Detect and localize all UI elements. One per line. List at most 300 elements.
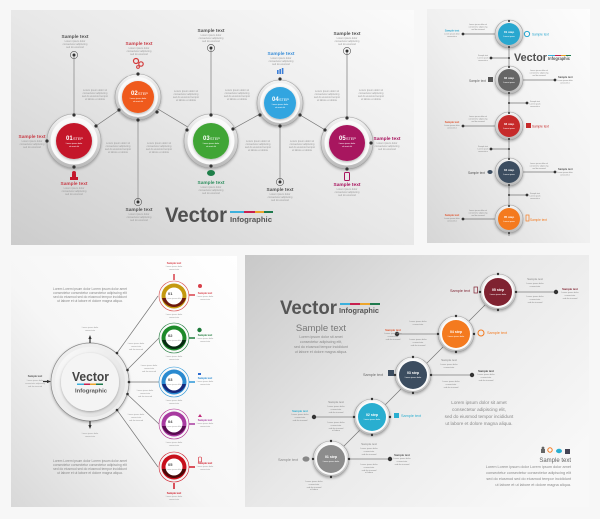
lorem blocks between steps: sed do eiusmod tempor: [314, 96, 340, 99]
lorem captions: Lorem ipsum dolor: [393, 457, 411, 460]
sample text labels row 1: consectetur adipiscing: [335, 191, 360, 194]
lorem blocks: Lorem ipsum dolor: [557, 171, 573, 174]
lorem blocks between steps: consectetur adipiscing: [106, 145, 131, 148]
step 4 navy: 04 step: [504, 168, 514, 172]
node labels: Sample text: [198, 418, 212, 422]
node captions: Lorem ipsum dolor: [197, 423, 214, 425]
lorem blocks: Lorem ipsum dolor sit: [530, 162, 549, 165]
lorem blocks between steps: consectetur adipiscing: [83, 92, 108, 95]
node captions: Lorem ipsum dolor: [197, 381, 214, 383]
node labels: Sample text: [167, 491, 181, 495]
step 1 red: [47, 114, 101, 168]
icons row bottom right: [541, 447, 570, 454]
step circles: 01 step: [504, 30, 514, 34]
lorem captions: sed do eiusmod: [444, 387, 459, 389]
title: Vector Infographic small: Infographic: [548, 56, 571, 61]
node captions: consectetur: [169, 316, 180, 319]
title: Vector Infographic: Vector: [165, 204, 227, 227]
step 5 maroon: 05 step: [492, 288, 504, 292]
step labels: Sample text: [278, 458, 299, 462]
node captions: Lorem ipsum dolor: [137, 390, 154, 392]
lorem blocks: consectetur: [530, 105, 540, 108]
node captions: consectetur: [169, 498, 180, 501]
node 1 gold: 01: [168, 291, 173, 296]
lorem blocks: sed do eiusmod: [471, 29, 485, 31]
lorem captions: Sample text: [441, 358, 457, 362]
step labels: Sample text: [558, 75, 573, 79]
step 3 red: Lorem ipsum: [503, 128, 515, 130]
lorem captions: consectetur: [530, 298, 541, 301]
lorem blocks: sed do eiusmod: [532, 75, 546, 77]
lorem blocks between steps: Lorem ipsum dolor sit: [174, 90, 198, 93]
sample text labels row 1: consectetur adipiscing: [199, 37, 224, 40]
node 1 gold: [159, 281, 189, 311]
node captions: consectetur: [169, 402, 180, 405]
step labels: Sample text: [394, 453, 410, 457]
lorem captions: consectetur: [413, 323, 424, 326]
node captions: sed do eiusmod: [142, 371, 156, 373]
sample text labels row 1: consectetur adipiscing: [269, 60, 294, 63]
lorem captions: Lorem ipsum dolor: [384, 332, 402, 335]
step 4 blue: 04: [272, 97, 279, 103]
lorem captions: Sample text: [527, 277, 543, 281]
title: Vector Infographic large: Vector: [280, 297, 337, 319]
connector dots: [45, 72, 373, 171]
lorem blocks: Lorem ipsum dolor: [557, 79, 573, 82]
step 5 orange: 05 step: [504, 215, 514, 219]
lorem blocks between steps: ut labore et dolore: [292, 149, 313, 152]
paragraph bottom right: Lorem Lorem ipsum dolor Lorem ipsum dolor amet: [486, 465, 572, 469]
lorem blocks between steps: ut labore et dolore: [85, 98, 106, 101]
step 5 purple: [321, 117, 373, 169]
lorem captions: consectetur: [446, 383, 457, 386]
node 4 magenta: [159, 409, 189, 439]
step labels: Sample text: [530, 218, 547, 222]
lorem blocks between steps: sed do eiusmod tempor: [146, 148, 172, 151]
node labels: Sample text: [198, 461, 212, 465]
lorem captions: Lorem ipsum dolor: [561, 291, 579, 294]
lorem blocks between steps: ut labore et dolore: [227, 98, 248, 101]
sample text labels row 1: consectetur adipiscing: [127, 216, 152, 219]
title: Vector Infographic: Infographic: [230, 215, 272, 224]
step labels: [278, 287, 578, 462]
lorem captions: Lorem ipsum dolor: [409, 338, 427, 341]
step 4 navy: Lorem ipsum: [503, 174, 515, 176]
step labels: Sample text: [478, 369, 494, 373]
node arrows and icons: [174, 274, 202, 489]
node captions: Lorem ipsum dolor: [128, 343, 145, 345]
node captions: consectetur: [169, 358, 180, 361]
lorem blocks: Lorem ipsum dolor sit: [469, 115, 488, 118]
step 2 orange: sit amet elit: [133, 100, 143, 103]
lorem captions: ut labore: [332, 429, 341, 432]
sample text labels row 1: Lorem ipsum dolor: [129, 47, 150, 50]
lorem captions: consectetur: [444, 366, 455, 369]
heading paragraph left: Lorem ipsum dolor sit amet: [299, 335, 343, 339]
step circles: Lorem ipsum: [503, 36, 515, 38]
lorem captions: Lorem ipsum dolor: [526, 295, 544, 298]
sample text labels row 1: sed do eiusmod: [202, 192, 220, 195]
lorem blocks: Lorem ipsum dolor: [444, 217, 460, 220]
hub circle: [51, 343, 129, 421]
sample text labels row 1: sed do eiusmod: [338, 43, 356, 46]
step labels: Sample text: [445, 213, 459, 217]
step 4 orange: 04 step: [450, 330, 462, 334]
lorem captions: sed do eiusmod: [479, 380, 494, 382]
step 3 green: [184, 114, 238, 168]
lorem blocks: consectetur adipiscing: [530, 164, 548, 168]
hub arrows: [43, 335, 130, 429]
node 4 magenta: 04: [168, 419, 173, 424]
paragraph bottom right: ut labore et ut labore et dolore magna aliqua.: [495, 483, 571, 487]
paragraph bottom: Lorem Lorem ipsum dolor Lorem ipsum dolor amet: [53, 459, 127, 463]
heading paragraph left: Sample text: [296, 323, 346, 334]
sample text labels row 1: Sample text: [198, 28, 225, 34]
node captions: consectetur: [144, 367, 155, 370]
lorem captions: Lorem ipsum dolor: [442, 380, 460, 383]
node captions: sed do eiusmod: [28, 386, 42, 388]
lorem captions: consectetur: [309, 483, 320, 486]
title: Vector Infographic small: [514, 52, 571, 64]
lorem captions: Lorem ipsum dolor: [360, 447, 378, 450]
sample text labels row 1: Lorem ipsum dolor: [377, 142, 398, 145]
node 2 green: 02: [168, 333, 173, 338]
step 2 gray: 02 step: [504, 76, 514, 80]
connector dots: [312, 273, 558, 478]
paragraph centre: ut labore et dolore magna aliqua.: [445, 421, 513, 426]
node captions: Lorem ipsum dolor: [166, 400, 183, 402]
lorem blocks: [444, 23, 573, 222]
sample text labels row 1: consectetur adipiscing: [20, 143, 45, 146]
lorem blocks: consectetur adipiscing: [469, 212, 487, 214]
lorem blocks: consectetur adipiscing: [469, 118, 487, 120]
lorem blocks between steps: ut labore et dolore: [149, 151, 170, 154]
lorem blocks: consectetur: [560, 174, 570, 176]
step labels: Sample text: [469, 79, 486, 83]
step 5 purple: STEP: [346, 137, 356, 141]
sample text labels row 1: Sample text: [334, 182, 361, 188]
step 1 red: STEP: [73, 137, 83, 141]
lorem captions: consectetur: [295, 416, 306, 419]
step 4 blue: sit amet elit: [275, 106, 285, 109]
paragraph top: Lorem Lorem ipsum dolor Lorem ipsum dolor amet: [53, 287, 127, 291]
paragraph bottom right: consectetur consectetur consectetur adipiscing elit: [486, 471, 572, 475]
lorem captions: sed do eiusmod: [329, 428, 344, 430]
sample text labels row 1: Lorem ipsum dolor: [337, 188, 358, 191]
heading paragraph left: [294, 323, 348, 354]
sample text labels row 1: sed do eiusmod: [23, 146, 41, 149]
lorem captions: consectetur: [388, 335, 399, 338]
title: Vector Infographic large: [280, 297, 380, 319]
sample text labels row 1: Sample text: [198, 180, 225, 186]
lorem blocks between steps: consectetur adipiscing: [147, 145, 172, 148]
step labels: Sample text: [487, 331, 508, 335]
node labels: Sample text: [198, 376, 212, 380]
node captions: Lorem ipsum dolor: [197, 466, 214, 468]
sample text labels row 1: Lorem ipsum dolor: [201, 186, 222, 189]
sample text labels row 1: sed do eiusmod: [65, 193, 83, 196]
step 5 maroon: [480, 274, 516, 310]
lorem blocks between steps: consectetur adipiscing: [359, 92, 384, 95]
paragraph bottom right: Sample text: [539, 458, 571, 464]
node captions: Lorem ipsum dolor: [166, 314, 183, 316]
lorem blocks: Sample text: [478, 145, 488, 148]
paragraph bottom: ut labore et ut labore et dolore magna aliqua.: [57, 471, 123, 475]
node captions: Lorem ipsum dolor: [82, 327, 99, 329]
sample text labels row 1: Lorem ipsum dolor: [65, 40, 86, 43]
sample text labels row 1: consectetur adipiscing: [62, 190, 87, 193]
paragraph bottom right: sed do eiusmod sed do eiusmod tempor incididunt: [486, 477, 572, 481]
lorem captions: Sample text: [361, 442, 377, 446]
sample text labels row 1: Sample text: [62, 34, 89, 40]
node captions: Lorem ipsum dolor: [166, 442, 183, 444]
lorem captions: consectetur: [364, 466, 375, 469]
lorem blocks: Lorem ipsum dolor: [444, 124, 460, 127]
sample text labels row 1: Sample text: [61, 181, 88, 187]
node captions: consectetur: [200, 340, 211, 343]
lorem blocks between steps: ut labore et dolore: [108, 151, 129, 154]
lorem captions: ut labore: [310, 488, 319, 491]
node captions: consectetur: [200, 468, 211, 471]
step 2 gray: Lorem ipsum: [503, 82, 515, 84]
title: Vector Infographic large: Infographic: [339, 308, 379, 315]
lorem blocks: sed do eiusmod: [471, 121, 485, 123]
step 1 gray: Lorem ipsum dolor: [323, 461, 340, 463]
sample text labels row 1: sed do eiusmod: [338, 194, 356, 197]
node captions: Lorem ipsum dolor: [166, 356, 183, 358]
step 4 orange: Lorem ipsum dolor: [448, 336, 465, 338]
node labels: Sample text: [28, 374, 42, 378]
lorem blocks: consectetur adipiscing: [530, 72, 548, 74]
sample text labels row 1: sed do eiusmod: [378, 148, 396, 151]
connector dots: [462, 20, 556, 234]
heading paragraph left: ut labore et dolore magna aliqua.: [295, 350, 347, 354]
sample text labels row 1: Lorem ipsum dolor: [337, 37, 358, 40]
lorem blocks: Sample text: [530, 100, 540, 103]
node 2 green: [159, 323, 189, 353]
step 2 orange: 02: [131, 91, 138, 97]
title: Vector Infographic small: Vector: [514, 52, 548, 64]
step circles: [495, 20, 523, 48]
step 2 orange: [115, 74, 161, 120]
heading paragraph left: consectetur adipiscing elit,: [300, 340, 342, 344]
lorem captions: Lorem ipsum dolor: [327, 421, 345, 424]
step 2 orange: STEP: [138, 92, 148, 96]
node captions: consectetur: [85, 329, 96, 332]
sample text labels row 1: Sample text: [126, 41, 153, 47]
step 3 green: Lorem ipsum dolor: [203, 143, 220, 145]
paragraph bottom: [53, 459, 127, 475]
node labels: Sample text: [167, 261, 181, 265]
sample text labels row 1: Sample text: [126, 207, 153, 213]
sample text labels row 1: Lorem ipsum dolor: [64, 187, 85, 190]
panel: radial hub: [11, 256, 237, 507]
node captions: Lorem ipsum dolor: [27, 380, 44, 382]
lorem blocks between steps: Lorem ipsum dolor sit: [83, 89, 107, 92]
lorem captions: consectetur: [565, 294, 576, 297]
sample text labels row 1: Sample text: [334, 31, 361, 37]
node 5 red: Lorem ipsum dolor: [167, 469, 182, 471]
lorem captions: sed do eiusmod: [411, 345, 426, 347]
step 5 purple: 05: [339, 136, 346, 142]
lorem blocks between steps: sed do eiusmod tempor: [245, 146, 271, 149]
lorem captions: sed do eiusmod: [528, 302, 543, 304]
lorem captions: consectetur: [364, 450, 375, 453]
step 1 red: sit amet elit: [69, 145, 79, 148]
node 3 blue: [159, 367, 189, 397]
step 4 blue: STEP: [279, 98, 289, 102]
node captions: consectetur: [169, 268, 180, 271]
lorem blocks: Sample text: [478, 54, 488, 57]
icons row 1: [70, 58, 350, 180]
paragraph bottom right: [486, 458, 572, 487]
lorem captions: Lorem ipsum dolor: [526, 282, 544, 285]
lorem captions: sed do eiusmod: [362, 454, 377, 456]
node captions: consectetur: [169, 444, 180, 447]
step labels: Sample text: [532, 32, 549, 36]
step 3 green: sit amet elit: [206, 145, 216, 148]
paragraph bottom: sed do eiusmod sed do eiusmod tempor incididunt: [53, 467, 127, 471]
sample text labels row 1: Lorem ipsum dolor: [129, 213, 150, 216]
step labels: [445, 28, 573, 222]
step 4 orange: [438, 316, 474, 352]
lorem blocks: Lorem ipsum: [478, 56, 489, 60]
lorem blocks between steps: consectetur adipiscing: [225, 92, 250, 95]
step 1 red: 01: [66, 136, 73, 142]
lorem captions: consectetur: [530, 285, 541, 288]
lorem blocks between steps: consectetur adipiscing: [174, 93, 199, 96]
lorem captions: [291, 277, 579, 491]
lorem blocks: consectetur: [447, 35, 457, 38]
node captions: Lorem ipsum dolor: [82, 433, 99, 435]
lorem blocks between steps: sed do eiusmod tempor: [82, 95, 108, 98]
sample text labels row 1: sed do eiusmod: [202, 40, 220, 43]
lorem captions: sed do eiusmod: [395, 464, 410, 466]
node captions: consectetur: [131, 345, 142, 348]
lorem captions: Lorem ipsum dolor: [440, 363, 458, 366]
node 2 green: Lorem ipsum dolor: [167, 340, 182, 342]
lorem blocks: Sample text: [530, 192, 540, 195]
step labels: Sample text: [292, 409, 308, 413]
step 1 gray: [313, 441, 349, 477]
lorem captions: sed do eiusmod: [563, 298, 578, 300]
sample text labels row 1: sed do eiusmod: [130, 53, 148, 56]
sample text labels row 1: consectetur adipiscing: [199, 189, 224, 192]
sample text labels row 1: Lorem ipsum dolor: [270, 193, 291, 196]
panel: diagonal steps: [245, 255, 589, 507]
node captions: Lorem ipsum dolor: [197, 338, 214, 340]
node captions: consectetur: [140, 392, 151, 395]
sample text labels row 1: Sample text: [267, 187, 294, 193]
lorem blocks between steps: ut labore et dolore: [176, 99, 197, 102]
lorem blocks: Lorem ipsum dolor sit: [469, 209, 488, 212]
step labels: Sample text: [385, 328, 401, 332]
lorem captions: Lorem ipsum dolor: [327, 405, 345, 408]
step labels: Sample text: [363, 373, 384, 377]
sample text labels row 1: consectetur adipiscing: [268, 196, 293, 199]
node captions: sed do eiusmod: [129, 420, 143, 422]
step 3 red: [495, 112, 523, 140]
step labels: Sample text: [532, 124, 549, 128]
node captions: Lorem ipsum dolor: [166, 496, 183, 498]
step labels: Sample text: [558, 167, 573, 171]
sample text labels row 1: consectetur adipiscing: [375, 145, 400, 148]
lorem blocks: Lorem ipsum dolor sit: [530, 69, 549, 72]
lorem captions: Lorem ipsum dolor: [305, 480, 323, 483]
step labels: Sample text: [445, 28, 459, 32]
lorem blocks: sed do eiusmod: [532, 168, 546, 170]
node captions: consectetur: [200, 425, 211, 428]
lorem blocks: Lorem ipsum dolor sit: [469, 23, 488, 26]
step 3 green: 03: [203, 136, 210, 142]
lorem captions: Lorem ipsum dolor: [477, 373, 495, 376]
sample text labels row 1: Sample text: [374, 136, 401, 142]
node 3 blue: 03: [168, 377, 173, 382]
lorem captions: sed do eiusmod: [362, 470, 377, 472]
sample text labels row 1: Sample text: [268, 51, 295, 57]
node captions: consectetur: [131, 416, 142, 419]
hub circle: Infographic: [75, 388, 107, 394]
sample text labels row 1: Lorem ipsum dolor: [271, 57, 292, 60]
step 3 navy: [395, 357, 431, 393]
lorem captions: consectetur: [331, 408, 342, 411]
paragraph centre: consectetur adipiscing elit,: [452, 407, 506, 412]
lorem captions: Lorem ipsum dolor: [360, 463, 378, 466]
sample text labels row 1: consectetur adipiscing: [335, 40, 360, 43]
node captions: consectetur: [85, 435, 96, 438]
lorem blocks: Lorem ipsum: [530, 102, 541, 106]
node labels: Sample text: [198, 333, 212, 337]
lorem blocks: Lorem ipsum: [530, 194, 541, 198]
lorem captions: sed do eiusmod: [293, 420, 308, 422]
step labels: Sample text: [450, 289, 471, 293]
lorem captions: consectetur: [331, 424, 342, 427]
node 5 red: [159, 452, 189, 482]
node 3 blue: Lorem ipsum dolor: [167, 384, 182, 386]
lorem blocks between steps: Lorem ipsum dolor sit: [106, 142, 130, 145]
lorem captions: Sample text: [328, 400, 344, 404]
lorem blocks between steps: ut labore et dolore: [248, 149, 269, 152]
node labels: Sample text: [198, 291, 212, 295]
sample text labels row 1: [19, 28, 401, 222]
lorem blocks between steps: Lorem ipsum dolor sit: [315, 90, 339, 93]
paragraph top: [53, 287, 127, 303]
step 1 red: Lorem ipsum dolor: [66, 143, 83, 145]
step 2 blue: Lorem ipsum dolor: [364, 419, 381, 421]
lorem blocks between steps: sed do eiusmod tempor: [358, 95, 384, 98]
node captions: consectetur: [200, 298, 211, 301]
lorem blocks: consectetur: [447, 126, 457, 130]
node captions: Lorem ipsum dolor: [166, 266, 183, 268]
step 1 gray: 01 step: [325, 455, 337, 459]
sample text labels row 1: Lorem ipsum dolor: [201, 34, 222, 37]
lorem blocks between steps: consectetur adipiscing: [315, 93, 340, 96]
sample text labels row 1: sed do eiusmod: [272, 63, 290, 66]
lorem blocks: Lorem ipsum: [478, 148, 489, 150]
sample text labels row 1: consectetur adipiscing: [127, 50, 152, 53]
lorem blocks: consectetur: [560, 82, 570, 84]
lorem captions: ut labore: [365, 471, 374, 474]
lorem blocks: consectetur adipiscing: [469, 26, 487, 28]
step labels: Sample text: [562, 287, 578, 291]
step 4 navy: [495, 158, 523, 186]
paragraph centre: [445, 400, 514, 426]
end-point rings: [70, 44, 351, 206]
lorem blocks: consectetur: [530, 197, 540, 200]
paragraph top: consectetur consectetur consectetur adipiscing elit: [53, 291, 127, 295]
node 4 magenta: Lorem ipsum dolor: [167, 426, 182, 428]
step 5 orange: [495, 205, 523, 233]
